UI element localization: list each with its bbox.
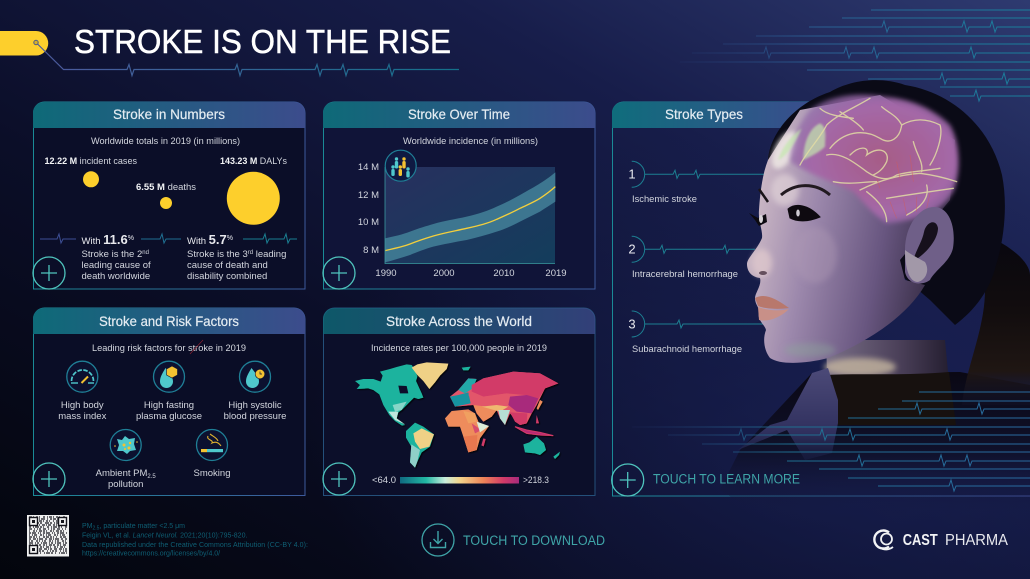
risk: body mass index: mass index (58, 411, 107, 422)
risk: ambient PM2.5 pollution: Ambient PM (96, 468, 147, 479)
panel: stroke types (612, 102, 1030, 496)
touch to download button: TOUCH TO DOWNLOAD (463, 533, 605, 548)
footnotes: PM (82, 523, 92, 530)
callout: 11.6 percent: death worldwide (82, 271, 150, 282)
plus button (33, 463, 65, 495)
stat: DALYs: 143.23 M DALYs (220, 156, 287, 167)
x axis labels: 2000 (433, 268, 455, 279)
panel header (33, 308, 305, 334)
europe (450, 392, 471, 407)
subtitle: Leading risk factors for stroke in 2019 (92, 343, 246, 354)
callout: 5.7 percent: Stroke is the 3 (187, 249, 248, 260)
risk: ambient PM2.5 pollution: 2.5 (147, 474, 156, 480)
panel header (323, 308, 595, 334)
risk: fasting plasma glucose: High fasting (144, 400, 194, 411)
yellow tab (0, 31, 48, 56)
y axis labels: 14 M (358, 162, 379, 173)
callout: 11.6 percent: leading cause of (82, 260, 151, 271)
heartbeat dividers (40, 234, 297, 243)
Cast Pharma logo (874, 530, 1008, 550)
callout: 11.6 percent (82, 232, 151, 282)
heading: Stroke in Numbers (113, 106, 225, 122)
facial highlights (752, 174, 837, 357)
type 2: Intracerebral hemorrhage (632, 269, 738, 280)
plus button (323, 463, 355, 495)
brain overlay (766, 95, 959, 223)
russia (472, 372, 558, 402)
risk: systolic blood pressure: blood pressure (224, 411, 286, 422)
risk: systolic blood pressure (224, 361, 286, 422)
far eyebrow (759, 189, 768, 202)
lips (755, 296, 789, 321)
risk: smoking: Smoking (194, 468, 230, 479)
subtitle: Incidence rates per 100,000 people in 2019 (371, 343, 547, 354)
callout: 5.7 percent (187, 232, 286, 282)
india (498, 410, 510, 425)
vessels (800, 98, 957, 222)
green activated area (778, 123, 825, 160)
heartbeat title line (36, 42, 459, 76)
title: STROKE IS ON THE RISE (74, 23, 451, 60)
panel header (33, 102, 305, 128)
callout: 5.7 percent: % (227, 235, 233, 242)
heading: Stroke Over Time (408, 106, 510, 122)
x axis labels: 2010 (493, 268, 515, 279)
panel: stroke across the world (323, 308, 595, 496)
panel frame (324, 102, 595, 289)
callout: 11.6 percent: nd (142, 250, 149, 256)
type 1: 1 (628, 166, 636, 182)
china (508, 395, 538, 413)
risk: fasting plasma glucose (136, 361, 202, 422)
panel: stroke in numbers (33, 102, 305, 289)
stat: deaths: 6.55 M deaths (136, 182, 196, 193)
subtitle: Worldwide totals in 2019 (in millions) (91, 136, 240, 147)
footnotes: 2.5 (92, 526, 100, 532)
cortex (790, 95, 959, 223)
type 2 (628, 236, 755, 280)
japan (537, 400, 543, 410)
touch to learn more button: TOUCH TO LEARN MORE (653, 472, 800, 486)
plot area (385, 167, 555, 264)
new zealand (553, 452, 560, 459)
x axis labels: 2019 (545, 268, 567, 279)
ear (905, 207, 954, 284)
y axis labels: 10 M (358, 217, 379, 228)
pale forehead glow (766, 127, 804, 173)
heading: Stroke Types (665, 106, 743, 122)
heading: Stroke and Risk Factors (99, 313, 239, 329)
Cast Pharma logo: CAST (903, 532, 938, 549)
callout: 5.7 percent: cause of death and (187, 260, 268, 271)
footnotes (82, 523, 308, 558)
south america (406, 423, 434, 468)
stat: incident cases: 12.22 M incident cases (44, 156, 137, 167)
heading: Stroke Across the World (386, 313, 532, 329)
panel header (323, 102, 595, 128)
southeast asia (510, 412, 527, 425)
callout: 5.7 percent: With 5.7 (187, 232, 227, 247)
type 1 (628, 161, 765, 205)
axes (385, 167, 555, 264)
panel: stroke over time (323, 102, 595, 289)
far eye (749, 213, 767, 226)
upper ECG line field (680, 10, 1030, 101)
central asia (468, 392, 510, 407)
risk: body mass index: High body (61, 400, 104, 411)
icon: population (385, 150, 416, 181)
lower ECG line field (632, 392, 1030, 491)
footnotes: Data republished under the Creative Commons Attribution (CC-BY 4.0): (82, 542, 308, 549)
panel frame (34, 308, 305, 496)
plus button (33, 257, 65, 289)
risk: fasting plasma glucose: plasma glucose (136, 411, 202, 422)
bubble: DALYs (227, 172, 280, 225)
callout: 11.6 percent: Stroke is the 2 (82, 249, 142, 260)
line node (34, 40, 38, 45)
north america (355, 364, 423, 426)
collar (738, 368, 838, 460)
callout: 5.7 percent: disability combined (187, 271, 267, 282)
red capillaries (877, 155, 930, 218)
eurasia base (450, 372, 558, 425)
jacket (720, 372, 1030, 515)
footnotes: https://creativecommons.org/licenses/by/4.0/ (82, 550, 220, 558)
line chart (358, 162, 567, 279)
panel frame (324, 308, 595, 496)
y axis labels: 12 M (358, 190, 379, 201)
africa (445, 409, 489, 452)
type 1: Ischemic stroke (632, 194, 697, 205)
type 2: 2 (628, 242, 636, 256)
header band (0, 23, 459, 76)
subtitle: Worldwide incidence (in millions) (403, 136, 538, 147)
callout: 11.6 percent: With 11.6 (82, 232, 128, 247)
QR code (27, 515, 69, 556)
callout: 11.6 percent: % (128, 235, 134, 242)
touch to learn more button (612, 464, 800, 496)
lit throat (824, 358, 896, 376)
ponytail (962, 235, 1030, 405)
red mark over subtitle (190, 340, 203, 354)
panel frame (34, 102, 305, 289)
mean line (385, 187, 555, 251)
face (747, 95, 955, 363)
hair (768, 80, 1005, 325)
nostril (759, 271, 767, 275)
madagascar (481, 438, 486, 446)
legend (372, 475, 549, 486)
legend: <64.0 (372, 475, 396, 486)
footnotes: , particulate matter <2.5 μm (99, 523, 185, 530)
risk: body mass index (58, 361, 107, 422)
risk: systolic blood pressure: High systolic (228, 400, 282, 411)
callout: 5.7 percent: leading (253, 249, 286, 260)
world map (355, 362, 560, 468)
risk: ambient PM2.5 pollution (96, 430, 156, 490)
greenland (412, 362, 448, 389)
panel: stroke and risk factors (33, 308, 305, 496)
uncertainty band (385, 172, 555, 262)
middle east (473, 405, 497, 422)
panel frame (612, 102, 1030, 496)
legend: >218.3 (523, 475, 549, 486)
type 3 (628, 311, 768, 355)
panel header (612, 102, 830, 128)
type 3: Subarachnoid hemorrhage (632, 344, 742, 355)
Cast Pharma logo: PHARMA (945, 532, 1008, 549)
neck (826, 340, 955, 425)
shirt shadow inside collar (826, 372, 956, 425)
portrait with illuminated brain (720, 80, 1030, 515)
x axis labels (375, 268, 567, 279)
footnotes: Feigin VL, et al. Lancet Neurol. 2021;20(10):795-820. (82, 532, 247, 540)
australia (523, 437, 546, 455)
y axis labels: 8 M (363, 245, 379, 256)
bubble: deaths (160, 197, 172, 209)
type 3: 3 (628, 316, 636, 332)
risk: ambient PM2.5 pollution: pollution (108, 479, 143, 490)
risk: smoking (194, 430, 230, 479)
bubble: incident cases (83, 171, 99, 187)
plus button (323, 257, 355, 289)
near eye (788, 205, 820, 221)
touch to download button (422, 524, 605, 556)
y axis labels (358, 162, 379, 256)
x axis labels: 1990 (375, 268, 397, 279)
near eyebrow (781, 186, 830, 195)
callout: 5.7 percent: rd (248, 250, 253, 256)
